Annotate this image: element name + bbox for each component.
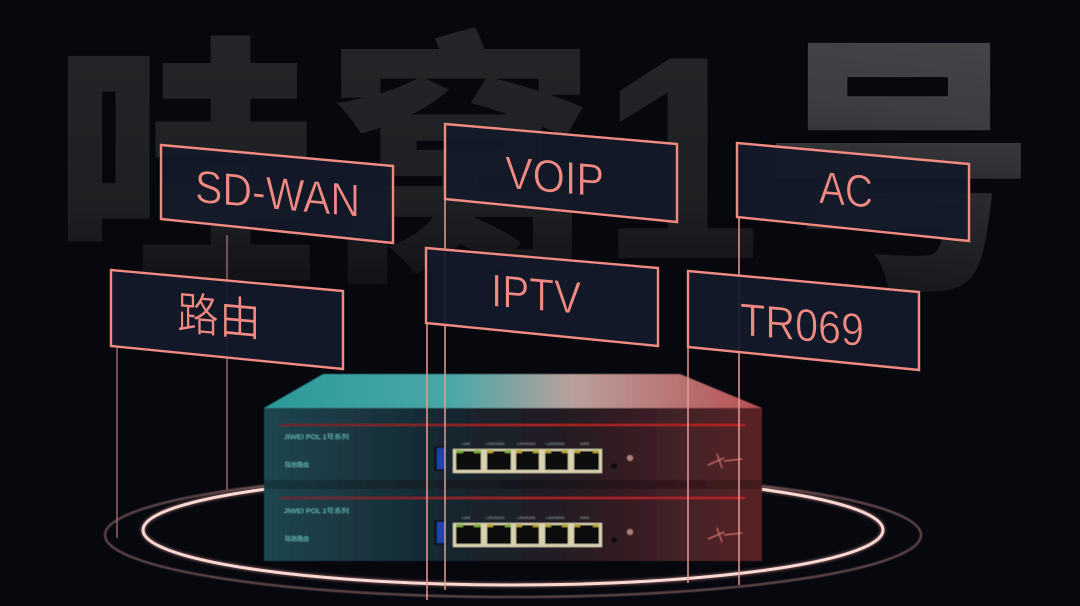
port captions: LAN/WAN bbox=[546, 441, 564, 446]
port captions bbox=[462, 441, 589, 520]
brand labels bbox=[284, 433, 349, 543]
port captions: LAN/WAN bbox=[486, 441, 504, 446]
background title: ghost characters: 1 bbox=[600, 0, 761, 320]
USB port top bbox=[434, 446, 445, 471]
background title: ghost characters: 窝 bbox=[326, 17, 594, 317]
unit divider bbox=[264, 480, 762, 489]
USB port bottom bbox=[434, 520, 445, 545]
red accent lines bbox=[280, 424, 745, 499]
label: TR069 bbox=[688, 271, 919, 370]
port captions: LAN bbox=[462, 515, 470, 520]
brand labels: 陆地路由 bbox=[285, 535, 309, 543]
device top face bbox=[264, 374, 762, 408]
ethernet ports bottom bbox=[453, 523, 602, 547]
label: 路由 bbox=[111, 270, 343, 369]
connector lines in front of the device bbox=[427, 199, 739, 600]
label: VOIP bbox=[445, 124, 677, 222]
port captions: LAN/WAN bbox=[486, 515, 504, 520]
port captions: LAN bbox=[462, 441, 470, 446]
brand labels: 陆地路由 bbox=[285, 461, 309, 469]
ethernet ports top bbox=[453, 449, 602, 473]
port captions: LAN/WAN bbox=[546, 515, 564, 520]
label: IPTV bbox=[426, 248, 658, 346]
label: VOIP: VOIP bbox=[505, 146, 604, 207]
rings: outer platform ellipse bbox=[105, 473, 921, 597]
device front face bbox=[264, 408, 762, 561]
label: IPTV: IPTV bbox=[491, 264, 581, 324]
port captions: WAN bbox=[580, 441, 589, 446]
device: stacked router bbox=[264, 374, 762, 561]
background title: ghost characters: 号 bbox=[763, 21, 1035, 325]
label: AC: AC bbox=[819, 161, 873, 218]
label: TR069: TR069 bbox=[740, 293, 864, 356]
connector lines behind the device bbox=[117, 235, 227, 538]
port captions: LAN/WAN bbox=[517, 515, 535, 520]
label: AC bbox=[737, 143, 969, 241]
brand labels: JIWEI POL 1号系列 bbox=[284, 433, 349, 441]
label: 路由: 路由 bbox=[177, 287, 261, 347]
port captions: WAN bbox=[580, 515, 589, 520]
port captions: LAN/WAN bbox=[517, 441, 535, 446]
label: SD-WAN bbox=[161, 145, 393, 243]
logo marks bbox=[708, 454, 742, 542]
rings: glowing inner ellipse bbox=[143, 475, 883, 585]
label: SD-WAN: SD-WAN bbox=[195, 160, 360, 227]
background title: ghost characters bbox=[52, 0, 1035, 325]
background title: ghost characters: 哇 bbox=[52, 20, 320, 320]
brand labels: JIWEI POL 1号系列 bbox=[284, 507, 349, 515]
reset buttons and LEDs bbox=[611, 455, 633, 543]
